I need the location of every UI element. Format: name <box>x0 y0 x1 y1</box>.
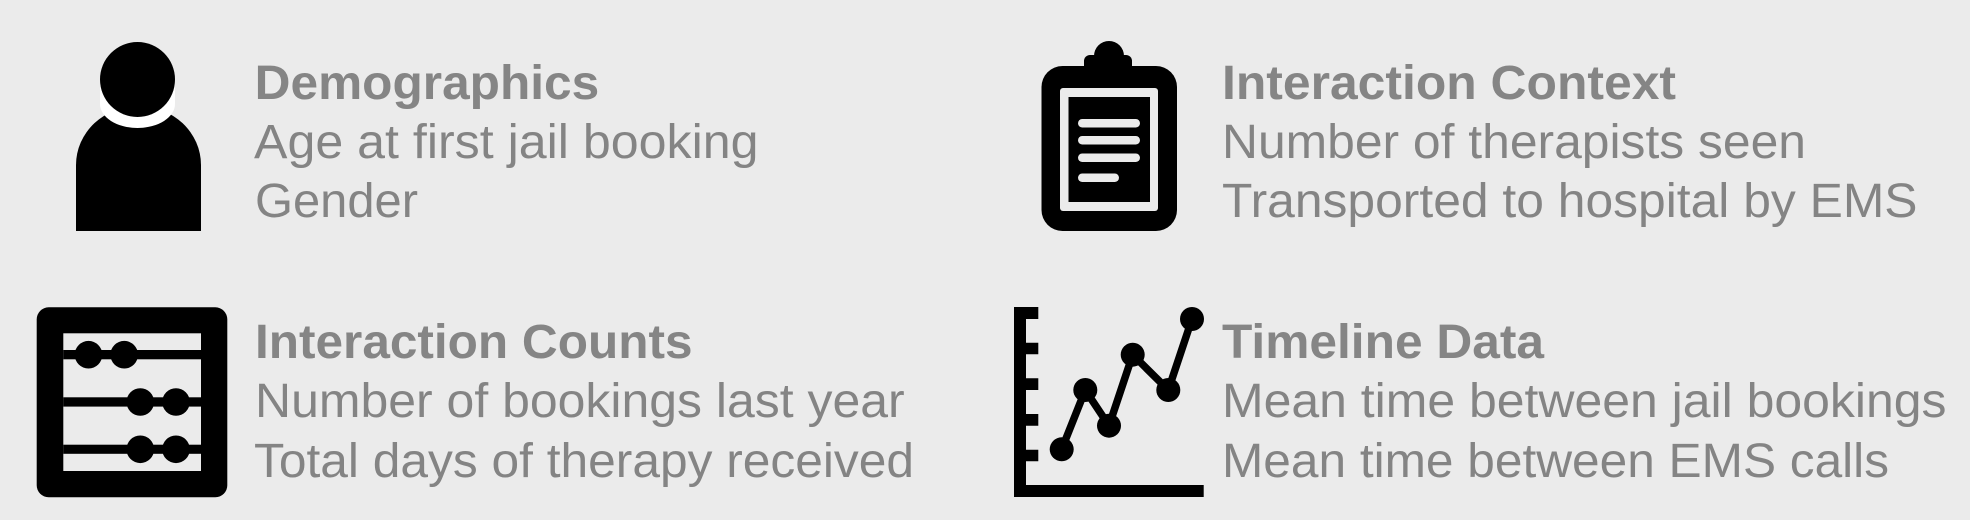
text: transported to hospital by EMS: Transported to hospital by EMS <box>1222 175 1918 228</box>
panel: interaction counts <box>37 307 914 497</box>
text: total days of therapy received: Total days of therapy received <box>254 435 914 488</box>
heading: timeline data: Timeline Data <box>1222 316 1544 369</box>
text: gender: Gender <box>255 175 418 228</box>
panel: interaction context <box>1042 41 1918 231</box>
heading: interaction context: Interaction Context <box>1222 57 1676 110</box>
text: mean time between jail bookings: Mean time between jail bookings <box>1222 375 1946 428</box>
icon: line chart <box>1014 307 1204 497</box>
icon: clipboard <box>1042 41 1177 231</box>
text: mean time between EMS calls: Mean time between EMS calls <box>1222 435 1889 488</box>
heading: demographics: Demographics <box>255 57 599 110</box>
text: number of therapists seen: Number of therapists seen <box>1222 116 1806 169</box>
icon: person <box>76 42 201 231</box>
text: age at first jail booking: Age at first jail booking <box>254 116 758 169</box>
heading: interaction counts: Interaction Counts <box>255 316 692 369</box>
panel: timeline data <box>1014 307 1946 497</box>
text: number of bookings last year: Number of bookings last year <box>255 375 905 428</box>
panel: demographics <box>76 42 758 231</box>
icon: abacus <box>37 307 227 497</box>
